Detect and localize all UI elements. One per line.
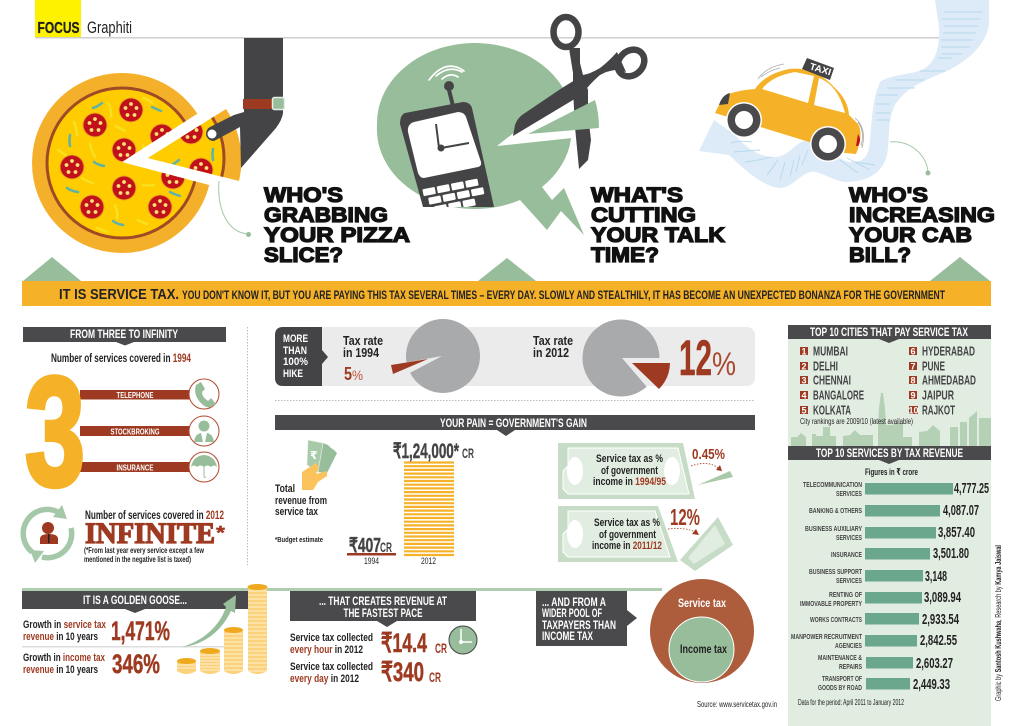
big number 3: 3 bbox=[25, 345, 85, 518]
header: Focus Graphiti: Graphiti bbox=[87, 19, 132, 37]
header: Focus Graphiti: FOCUS bbox=[38, 20, 80, 37]
bar chart: services by tax revenue: 2,603.27 bbox=[916, 656, 953, 672]
panel: right column bbox=[788, 325, 991, 726]
arrow: rising growth bbox=[182, 595, 236, 647]
banner: it is service tax bbox=[22, 281, 991, 306]
text: every day: ₹340 bbox=[381, 657, 424, 687]
bar chart: total revenue: ₹407 bbox=[349, 535, 381, 557]
credit line: Graphic by Santosh Kushwaha, Research by Kamya Jaiswal bbox=[993, 545, 1003, 701]
bar chart: services by tax revenue: AGENCIES bbox=[835, 641, 862, 650]
bar chart: services by tax revenue bbox=[791, 480, 989, 693]
panel: golden goose bbox=[22, 584, 268, 679]
icon: umbrella bbox=[189, 452, 219, 482]
footnote: *Budget estimate bbox=[275, 537, 323, 544]
section header: top 10 cities bbox=[788, 325, 991, 343]
value 12% with arrow bbox=[668, 504, 700, 535]
text: every hour: Service tax collected bbox=[290, 632, 373, 644]
list: city ranking: 10 bbox=[908, 406, 919, 416]
icon: telephone bbox=[189, 379, 219, 409]
callout: ... AND FROM A bbox=[542, 597, 606, 609]
list: city ranking: 8 bbox=[910, 376, 916, 386]
bar chart: services by tax revenue: BUSINESS AUXILIARY bbox=[805, 524, 862, 533]
text: every hour: ₹14.4 bbox=[381, 628, 427, 658]
list: city ranking: 6 bbox=[910, 346, 916, 356]
text: service tax growth: 1,471% bbox=[111, 616, 170, 646]
bar chart: services by tax revenue: RENTING OF bbox=[829, 590, 862, 599]
text: tax rate in 1994: 5 bbox=[344, 364, 352, 384]
list: city ranking: 3 bbox=[801, 376, 807, 386]
text: every day bbox=[290, 657, 441, 687]
bar chart: services by tax revenue: MANPOWER RECRUITMENT bbox=[791, 632, 862, 641]
heading: what's cutting your talk time: WHAT'S bbox=[591, 184, 683, 207]
text: income tax growth: Growth in income tax bbox=[23, 652, 106, 664]
taxi car: TAXI bbox=[808, 61, 832, 78]
panel: from three to infinity: * bbox=[216, 523, 225, 543]
bars with service names: STOCKBROKING bbox=[110, 426, 160, 436]
banknote 2011/12: of government bbox=[599, 529, 656, 541]
list: city ranking: RAJKOT bbox=[922, 404, 955, 418]
section header: ... THAT CREATES REVENUE AT bbox=[319, 596, 447, 608]
note: data period: Data for the period: April 2011 to January 2012 bbox=[798, 698, 904, 707]
bar chart: total revenue: CR bbox=[462, 445, 474, 461]
heading: who's grabbing your pizza slice bbox=[264, 184, 410, 267]
text: income tax growth: 346% bbox=[112, 649, 160, 679]
callout: TAXPAYERS THAN bbox=[542, 620, 616, 632]
text: tax rate in 2012: in 2012 bbox=[533, 345, 569, 360]
bar chart: total revenue: 1994 bbox=[364, 556, 379, 566]
text: tax rate in 2012 bbox=[533, 333, 573, 360]
panel: from three to infinity bbox=[23, 327, 226, 564]
section header: top 10 services: TOP 10 SERVICES BY TAX REVENUE bbox=[816, 446, 963, 460]
bar chart: services by tax revenue: 3,501.80 bbox=[933, 546, 969, 562]
section header: top 10 services bbox=[788, 446, 991, 464]
illustration: taxi on a long receipt bbox=[699, 0, 989, 188]
heading: what's cutting your talk time: YOUR TALK bbox=[591, 224, 725, 247]
panel: wider pool of taxpayers bbox=[536, 579, 777, 709]
icon: recycling arrows with person bbox=[23, 505, 72, 563]
pie chart 2012 bbox=[582, 320, 670, 398]
text: every day: CR bbox=[429, 669, 441, 685]
text: total revenue: revenue from bbox=[275, 495, 327, 507]
icon: scissors bbox=[513, 17, 650, 169]
bar chart: services by tax revenue: WORKS CONTRACTS bbox=[810, 615, 862, 624]
heading: who's increasing your cab bill: YOUR CAB bbox=[849, 224, 972, 247]
icon: mobile phone with clock bbox=[400, 66, 494, 215]
bar chart: services by tax revenue: IMMOVABLE PROPERTY bbox=[800, 599, 862, 608]
banknote 1994/95 bbox=[558, 443, 733, 499]
text: every hour bbox=[290, 628, 447, 658]
bar chart: services by tax revenue: SERVICES bbox=[836, 489, 862, 498]
section header bbox=[290, 591, 476, 627]
bar chart: total revenue: CR bbox=[380, 539, 392, 555]
banknote 2011/12 bbox=[558, 506, 733, 571]
text: tax rate in 1994 bbox=[343, 333, 383, 384]
callout: more than 100% hike bbox=[275, 327, 328, 386]
bar chart: total revenue: ₹1,24,000* bbox=[393, 440, 460, 463]
bar chart: total revenue: 2012 bbox=[421, 556, 436, 566]
heading: what's cutting your talk time: CUTTING bbox=[591, 204, 696, 227]
pizza slice bbox=[148, 109, 242, 181]
footnote bbox=[84, 546, 205, 564]
diagram: service tax and income tax circles: Income tax bbox=[680, 642, 727, 656]
banknote 1994/95: of government bbox=[601, 465, 658, 477]
heading: what's cutting your talk time bbox=[591, 184, 725, 267]
bar chart: services by tax revenue: GOODS BY ROAD bbox=[818, 683, 862, 692]
skyline illustration bbox=[791, 393, 991, 446]
banknote 2011/12: Service tax as % bbox=[594, 517, 660, 529]
text: every day: Service tax collected bbox=[290, 661, 373, 673]
text: infinite: INFINITE bbox=[85, 517, 215, 550]
bar chart: services by tax revenue: MAINTENANCE & bbox=[818, 653, 862, 662]
panel: your pain government's gain bbox=[275, 415, 755, 571]
list: city ranking: KOLKATA bbox=[813, 404, 851, 418]
text: services in 2012: Number of services covered in 2012 bbox=[85, 510, 224, 522]
text: every day: every day in 2012 bbox=[290, 673, 359, 685]
text: tax rate in 2012: Tax rate bbox=[533, 333, 573, 348]
text: income tax growth: revenue in 10 years bbox=[23, 664, 98, 676]
heading: what's cutting your talk time: TIME? bbox=[591, 244, 659, 267]
text: services in 1994: Number of services covered in 1994 bbox=[51, 353, 191, 365]
section header: YOUR PAIN = GOVERNMENT'S GAIN bbox=[440, 418, 587, 430]
list: city ranking: DELHI bbox=[813, 360, 838, 374]
list: city ranking: MUMBAI bbox=[813, 344, 848, 358]
heading: who's increasing your cab bill: WHO'S bbox=[849, 184, 928, 207]
section header: IT IS A GOLDEN GOOSE... bbox=[83, 595, 187, 607]
list: city ranking: 5 bbox=[801, 406, 807, 416]
value 12%: 12 bbox=[679, 330, 712, 386]
bar chart: services by tax revenue: 3,857.40 bbox=[938, 525, 975, 541]
list: city ranking: 7 bbox=[910, 362, 916, 372]
list: city ranking bbox=[800, 344, 976, 418]
heading: who's increasing your cab bill: INCREASING bbox=[849, 204, 995, 227]
callout: INCOME TAX bbox=[542, 631, 593, 643]
icon: stacks of coins bbox=[177, 584, 268, 674]
banknote 1994/95: income in 1994/95 bbox=[593, 476, 666, 488]
bar chart: services by tax revenue: TELECOMMUNICATION bbox=[803, 480, 862, 489]
callout: more than 100% hike: HIKE bbox=[283, 368, 303, 380]
text: every hour: CR bbox=[435, 640, 447, 656]
list: city ranking: AHMEDABAD bbox=[922, 374, 976, 388]
text: tax rate in 1994: in 1994 bbox=[343, 345, 380, 360]
bar chart: services by tax revenue: BANKING & OTHERS bbox=[809, 506, 862, 515]
bar chart: services by tax revenue: SERVICES bbox=[836, 533, 862, 542]
footnote: mentioned in the negative list is taxed) bbox=[84, 555, 191, 564]
section header bbox=[22, 591, 248, 613]
bar chart: services by tax revenue: 2,842.55 bbox=[920, 633, 957, 649]
triangles pointing up from banner bbox=[23, 257, 990, 281]
bar chart: services by tax revenue: 3,089.94 bbox=[924, 590, 961, 606]
list: city ranking: 9 bbox=[910, 390, 916, 400]
bar chart: services by tax revenue: 3,148 bbox=[925, 569, 947, 585]
pie chart 1994 bbox=[391, 319, 480, 393]
value 0.45% with arrow bbox=[691, 446, 725, 471]
banner: it is service tax: IT IS SERVICE TAX. bbox=[59, 286, 179, 303]
heading: who's increasing your cab bill bbox=[849, 184, 995, 267]
banknote 1994/95: Service tax as % bbox=[596, 453, 663, 465]
text: service tax growth: revenue in 10 years bbox=[23, 631, 98, 643]
diagram: service tax and income tax circles: Service tax bbox=[678, 596, 726, 610]
bars with service names: INSURANCE bbox=[116, 462, 154, 472]
illustration: speech bubble with phone and scissors bbox=[377, 17, 650, 235]
section header: FROM THREE TO INFINITY bbox=[70, 329, 178, 341]
section header bbox=[23, 327, 226, 346]
icon: clock bbox=[449, 626, 477, 654]
list: city ranking: BANGALORE bbox=[813, 388, 864, 402]
header: Focus Graphiti bbox=[35, 0, 941, 38]
taxi car bbox=[715, 58, 863, 162]
bar chart: services by tax revenue: REPAIRS bbox=[839, 662, 862, 671]
callout: WIDER POOL OF bbox=[542, 608, 602, 620]
heading: who's increasing your cab bill: BILL? bbox=[849, 244, 911, 267]
bar chart: services by tax revenue: INSURANCE bbox=[831, 550, 862, 559]
text: income tax growth bbox=[23, 649, 160, 679]
bar chart: services by tax revenue: 2,933.54 bbox=[922, 612, 959, 628]
panel: fastest pace bbox=[290, 591, 477, 687]
text: total revenue: service tax bbox=[275, 506, 319, 518]
diagram: service tax and income tax circles bbox=[650, 579, 754, 683]
text: tax rate in 1994: Tax rate bbox=[343, 333, 383, 348]
list: city ranking: CHENNAI bbox=[813, 374, 851, 388]
bars with service names bbox=[80, 390, 190, 472]
icon: hand holding money: ₹ bbox=[310, 449, 318, 462]
heading: who's grabbing your pizza slice: WHO'S bbox=[264, 184, 343, 207]
text: service tax growth bbox=[23, 616, 170, 646]
illustration: pizza with hand grabbing a slice bbox=[32, 38, 284, 253]
footnote: (*From last year every service except a few bbox=[84, 546, 205, 555]
text: tax rate in 1994: % bbox=[352, 367, 363, 383]
list: city ranking: 2 bbox=[801, 362, 807, 372]
value 0.45% with arrow: 0.45% bbox=[692, 446, 725, 463]
value 12%: % bbox=[712, 346, 736, 382]
heading: who's grabbing your pizza slice: YOUR PIZZA bbox=[264, 224, 410, 247]
value 12% with arrow: 12% bbox=[670, 504, 700, 530]
note: city rankings: City rankings are 2009/10 (latest available) bbox=[800, 417, 913, 426]
heading: who's grabbing your pizza slice: SLICE? bbox=[264, 244, 343, 267]
callout: more than 100% hike: 100% bbox=[283, 356, 308, 368]
icon: hand holding money bbox=[302, 440, 337, 490]
text: total revenue bbox=[275, 483, 327, 518]
source: Source: www.servicetax.gov.in bbox=[697, 699, 777, 709]
bars with service names: TELEPHONE bbox=[116, 390, 154, 400]
section header bbox=[275, 415, 755, 436]
bar chart: services by tax revenue: BUSINESS SUPPORT bbox=[809, 567, 862, 576]
bar chart: services by tax revenue: 4,087.07 bbox=[943, 503, 979, 519]
bar chart: total revenue bbox=[347, 440, 474, 566]
callout: more than 100% hike: MORE bbox=[283, 333, 308, 345]
list: city ranking: JAIPUR bbox=[922, 388, 954, 402]
list: city ranking: 4 bbox=[801, 390, 807, 400]
bar chart: services by tax revenue: 4,777.25 bbox=[954, 481, 989, 497]
panel: tax rate comparison bbox=[275, 319, 755, 398]
section header: THE FASTEST PACE bbox=[344, 608, 423, 620]
list: city ranking: HYDERABAD bbox=[922, 344, 975, 358]
sleeve and hand bbox=[206, 38, 284, 168]
list: city ranking: 1 bbox=[801, 346, 807, 356]
bar chart: services by tax revenue: SERVICES bbox=[836, 576, 862, 585]
callout: more than 100% hike: THAN bbox=[283, 345, 307, 357]
icon: person bbox=[189, 416, 219, 446]
banknote 2011/12: income in 2011/12 bbox=[592, 540, 662, 552]
heading: who's grabbing your pizza slice: GRABBING bbox=[264, 204, 388, 227]
text: total revenue: Total bbox=[275, 483, 295, 495]
note: figures in crore: Figures in ₹ crore bbox=[865, 467, 918, 478]
callout bbox=[536, 591, 637, 646]
list: city ranking: PUNE bbox=[922, 360, 945, 374]
text: service tax growth: Growth in service tax bbox=[23, 619, 107, 631]
bar chart: services by tax revenue: 2,449.33 bbox=[913, 677, 950, 693]
bar chart: services by tax revenue: TRANSPORT OF bbox=[822, 674, 862, 683]
text: every hour: every hour in 2012 bbox=[290, 644, 363, 656]
